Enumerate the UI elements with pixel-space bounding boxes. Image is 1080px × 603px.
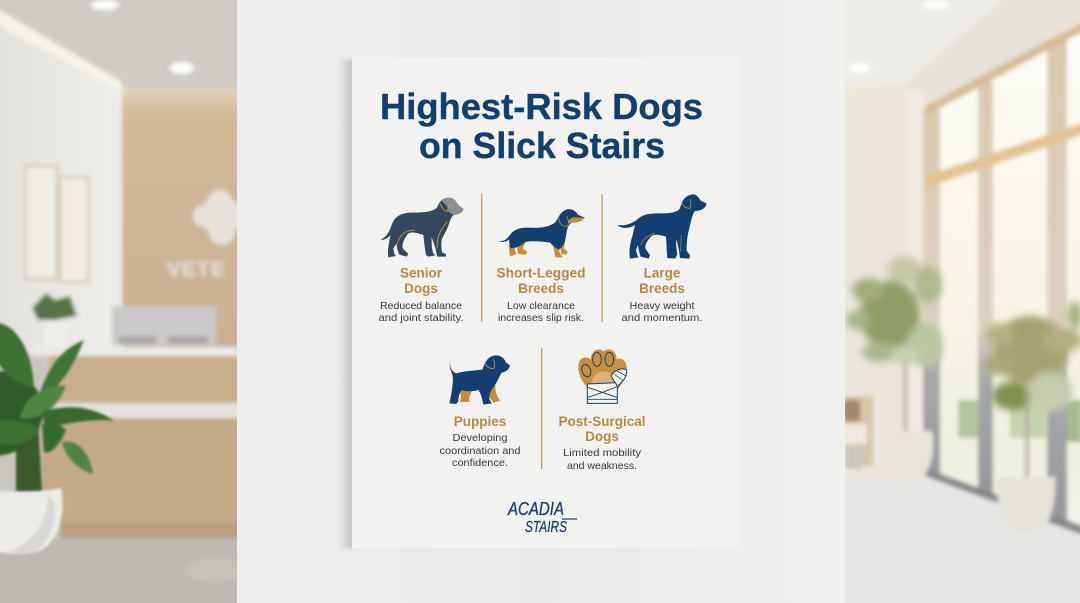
item: post-surgical dogs — [558, 349, 646, 472]
center wall — [237, 0, 845, 603]
text: post-surgical description: and weakness. — [567, 460, 637, 472]
chair — [845, 396, 873, 466]
text: short-legged description: increases slip risk. — [498, 312, 584, 324]
text: senior dogs description — [378, 300, 464, 324]
foreground plant, left — [0, 323, 114, 492]
text: large breeds description — [622, 300, 702, 324]
item: puppies — [440, 355, 521, 469]
heading: short-legged breeds — [496, 266, 586, 296]
poster shadow — [338, 60, 353, 548]
heading: short-legged breeds: Short-Legged — [496, 266, 586, 280]
text: short-legged description — [498, 300, 584, 324]
sign on wood — [193, 190, 248, 245]
icon: senior dog — [381, 198, 464, 257]
logo: Acadia Stairs — [507, 499, 577, 536]
window panes — [925, 18, 1080, 535]
text: post-surgical description: Limited mobility — [563, 447, 642, 459]
text: short-legged description: Low clearance — [507, 300, 575, 312]
heading: short-legged breeds: Breeds — [518, 281, 564, 296]
poster panel — [352, 57, 739, 548]
background plants, soft foliage — [846, 256, 1080, 412]
small plant — [44, 322, 66, 352]
heading: post-surgical dogs — [558, 414, 646, 444]
monitor — [112, 306, 216, 345]
background: blurred reception area, left — [0, 0, 248, 603]
text: puppies description: confidence. — [452, 457, 508, 469]
item: senior dogs — [378, 198, 464, 324]
heading: puppies: Puppies — [454, 414, 506, 429]
text: large breeds description: and momentum. — [622, 312, 702, 324]
text: post-surgical description — [563, 447, 642, 472]
posts — [923, 110, 940, 475]
background: blurred reception area, left: VETE — [167, 258, 226, 281]
logo: Acadia Stairs: STAIRS — [525, 519, 567, 536]
heading: senior dogs: Senior — [400, 266, 443, 280]
item: short-legged breeds — [496, 209, 586, 324]
icon: short-legged dog — [498, 209, 585, 257]
divider row 2 — [541, 348, 542, 469]
heading: senior dogs — [400, 266, 443, 296]
floor — [840, 476, 1080, 603]
heading: large breeds: Large — [644, 266, 681, 280]
icon: large dog — [617, 194, 707, 259]
beams — [925, 19, 1080, 116]
text: puppies description: Developing — [452, 432, 508, 444]
heading: post-surgical dogs: Post-Surgical — [558, 414, 646, 429]
stems — [903, 350, 908, 435]
logo: Acadia Stairs: ACADIA — [507, 499, 564, 519]
text: senior dogs description: and joint stability. — [378, 312, 464, 324]
heading: large breeds: Breeds — [639, 281, 685, 296]
icon: puppy — [449, 355, 510, 405]
text: puppies description: coordination and — [440, 445, 521, 457]
item: large breeds — [617, 194, 707, 324]
title: Highest-Risk Dogs — [380, 86, 703, 127]
pot — [0, 488, 63, 554]
title — [380, 86, 703, 166]
heading: senior dogs: Dogs — [404, 281, 438, 296]
heading: large breeds — [639, 266, 685, 296]
pots — [881, 431, 933, 481]
background: blurred window wall, right — [840, 0, 1080, 603]
title: on Slick Stairs — [419, 125, 665, 166]
icon: bandaged paw — [578, 349, 627, 403]
divider row 1 left — [481, 194, 482, 322]
desk — [50, 354, 242, 404]
text: large breeds description: Heavy weight — [630, 300, 695, 312]
text: puppies description — [440, 432, 521, 469]
heading: post-surgical dogs: Dogs — [585, 429, 619, 444]
divider row 1 right — [602, 194, 603, 322]
frames — [25, 166, 57, 279]
text: senior dogs description: Reduced balance — [380, 300, 462, 312]
